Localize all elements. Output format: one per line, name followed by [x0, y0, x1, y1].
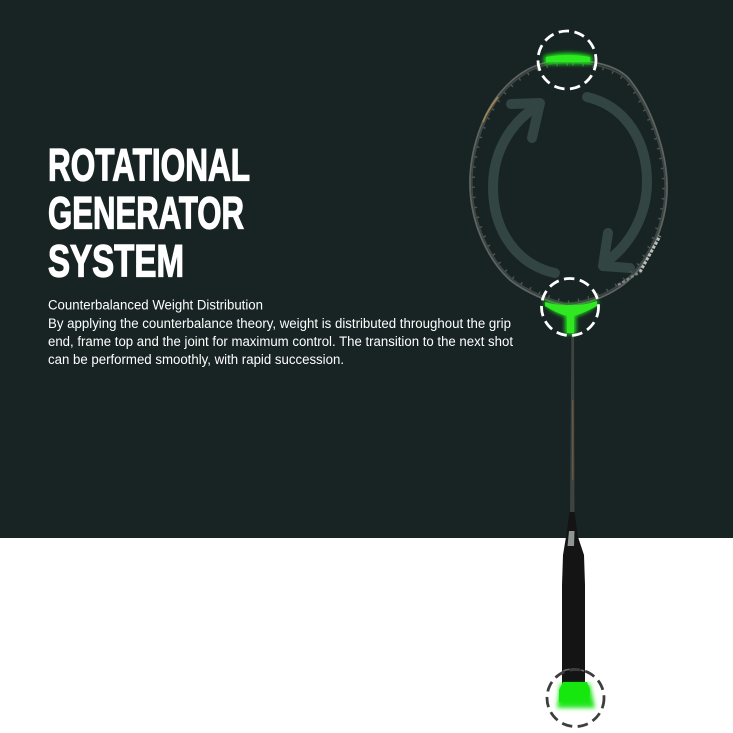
- green highlight: frame top: [544, 53, 592, 64]
- racket shaft: [570, 318, 574, 518]
- rotation arrows: [493, 97, 647, 273]
- description text: [48, 298, 513, 367]
- racket frame: [470, 60, 667, 306]
- title: [48, 140, 250, 286]
- title: SYSTEM: [48, 236, 184, 286]
- green highlight: joint: [544, 300, 598, 334]
- green highlight: grip end: [557, 682, 595, 708]
- dark background panel: [0, 0, 733, 538]
- title: GENERATOR: [48, 188, 244, 238]
- dashed circle: grip end: [547, 670, 604, 726]
- arrow: clockwise right side: [587, 97, 647, 268]
- description text: Counterbalanced Weight Distribution: [48, 298, 263, 312]
- dashed circle: joint: [542, 278, 598, 336]
- arrow: clockwise left side: [493, 103, 555, 273]
- racket handle: [562, 512, 585, 684]
- description text: By applying the counterbalance theory, weight is distributed throughout the grip: [48, 316, 511, 331]
- dashed circle: frame top: [538, 31, 596, 89]
- description text: can be performed smoothly, with rapid succession.: [48, 352, 344, 367]
- racket: [470, 60, 667, 684]
- title: ROTATIONAL: [48, 140, 250, 190]
- description text: end, frame top and the joint for maximum control. The transition to the next shot: [48, 334, 513, 349]
